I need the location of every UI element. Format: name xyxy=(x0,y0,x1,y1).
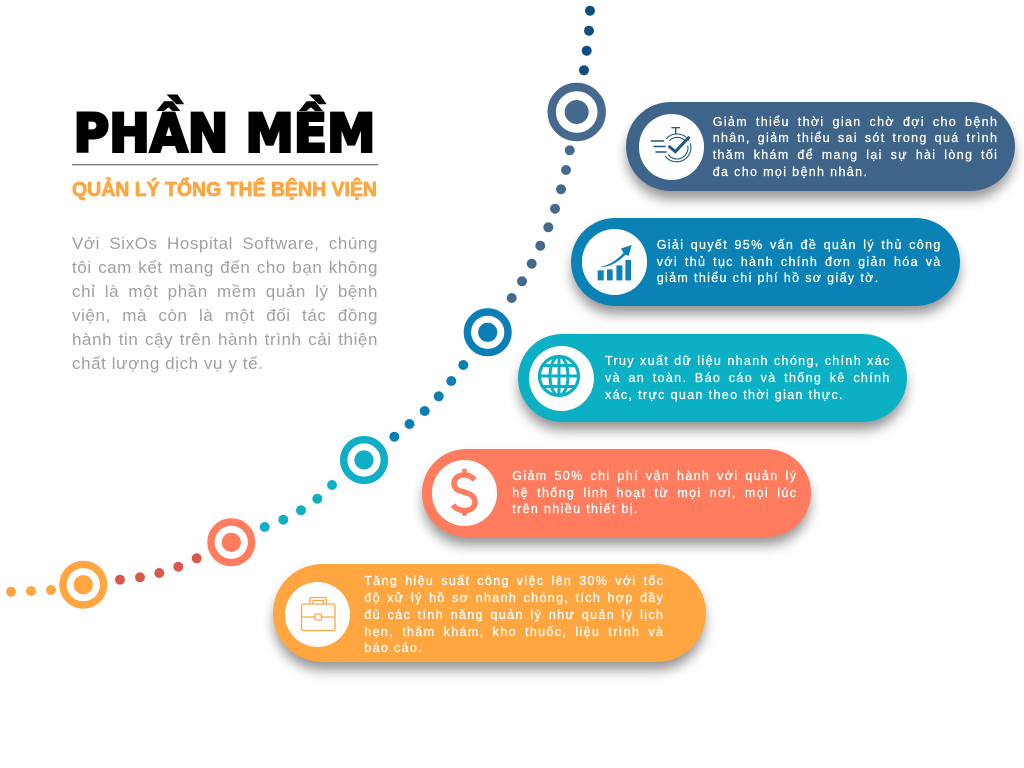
text: với thủ tục hành chính đơn giản hóa và xyxy=(657,255,942,269)
intro paragraph: tôi cam kết mang đến cho bạn không xyxy=(72,258,378,277)
intro paragraph: hành tin cậy trên hành trình cải thiện xyxy=(72,330,378,349)
text: nhân, giảm thiểu sai sót trong quá trình xyxy=(713,131,998,145)
panel: manual work xyxy=(571,218,960,306)
intro paragraph: viện, mà còn là một đối tác đồng xyxy=(72,306,378,325)
text: trên nhiều thiết bị. xyxy=(512,502,639,516)
dots: blue xyxy=(389,360,468,442)
milestone ring 3 xyxy=(344,440,384,480)
text: đủ các tính năng quản lý như quản lý lịch xyxy=(364,608,664,622)
text: và an toàn. Báo cáo và thống kê chính xyxy=(605,371,891,385)
icon: globe xyxy=(529,346,594,411)
text: thăm khám để mang lại sự hài lòng tối xyxy=(713,148,998,162)
subtitle: QUẢN LÝ TỔNG THỂ BỆNH VIỆN xyxy=(72,177,377,201)
text: xác, trực quan theo thời gian thực. xyxy=(605,388,844,402)
icon: growth chart xyxy=(582,229,647,295)
text xyxy=(712,115,998,179)
dots: top navy xyxy=(579,6,595,75)
icon: briefcase xyxy=(285,582,350,647)
text: báo cáo. xyxy=(364,641,423,655)
intro paragraph xyxy=(72,234,378,373)
milestone ring 1 xyxy=(552,87,602,137)
text: Tăng hiệu suất công việc lên 30% với tốc xyxy=(364,574,664,588)
title block xyxy=(72,94,378,201)
text: Giảm 50% chi phí vận hành với quản lý xyxy=(512,469,797,483)
intro paragraph: chỉ là một phần mềm quản lý bệnh xyxy=(72,282,378,301)
dots: teal xyxy=(260,480,337,532)
icon: dollar xyxy=(432,460,497,526)
milestone ring 5 xyxy=(63,564,104,605)
text xyxy=(364,574,664,655)
panel: wait time xyxy=(626,102,1015,191)
text: Truy xuất dữ liệu nhanh chóng, chính xác xyxy=(605,354,891,368)
panel: data access xyxy=(518,334,907,422)
dots: red xyxy=(115,553,202,585)
text: hệ thống linh hoạt từ mọi nơi, mọi lúc xyxy=(512,486,797,500)
text: Giảm thiểu thời gian chờ đợi cho bệnh xyxy=(713,115,998,129)
milestone ring 4 xyxy=(211,522,252,563)
dots: slate xyxy=(507,145,575,303)
panel: productivity xyxy=(273,564,706,662)
text xyxy=(656,238,942,285)
panel: cost savings xyxy=(422,449,811,537)
icon: stopwatch xyxy=(639,114,704,180)
text: đa cho mọi bệnh nhân. xyxy=(713,165,868,179)
dots: orange xyxy=(6,585,56,597)
milestone ring 2 xyxy=(467,312,508,353)
intro paragraph: chất lượng dịch vụ y tế. xyxy=(72,354,263,373)
text xyxy=(512,469,797,516)
text: độ xử lý hồ sơ nhanh chóng, tích hợp đầy xyxy=(364,591,664,605)
text xyxy=(604,354,891,402)
intro paragraph: Với SixOs Hospital Software, chúng xyxy=(72,234,378,253)
text: giảm thiểu chi phí hồ sơ giấy tờ. xyxy=(657,271,880,285)
text: Giải quyết 95% vấn đề quản lý thủ công xyxy=(657,238,942,252)
text: hẹn, thăm khám, kho thuốc, liệu trình và xyxy=(364,625,664,639)
